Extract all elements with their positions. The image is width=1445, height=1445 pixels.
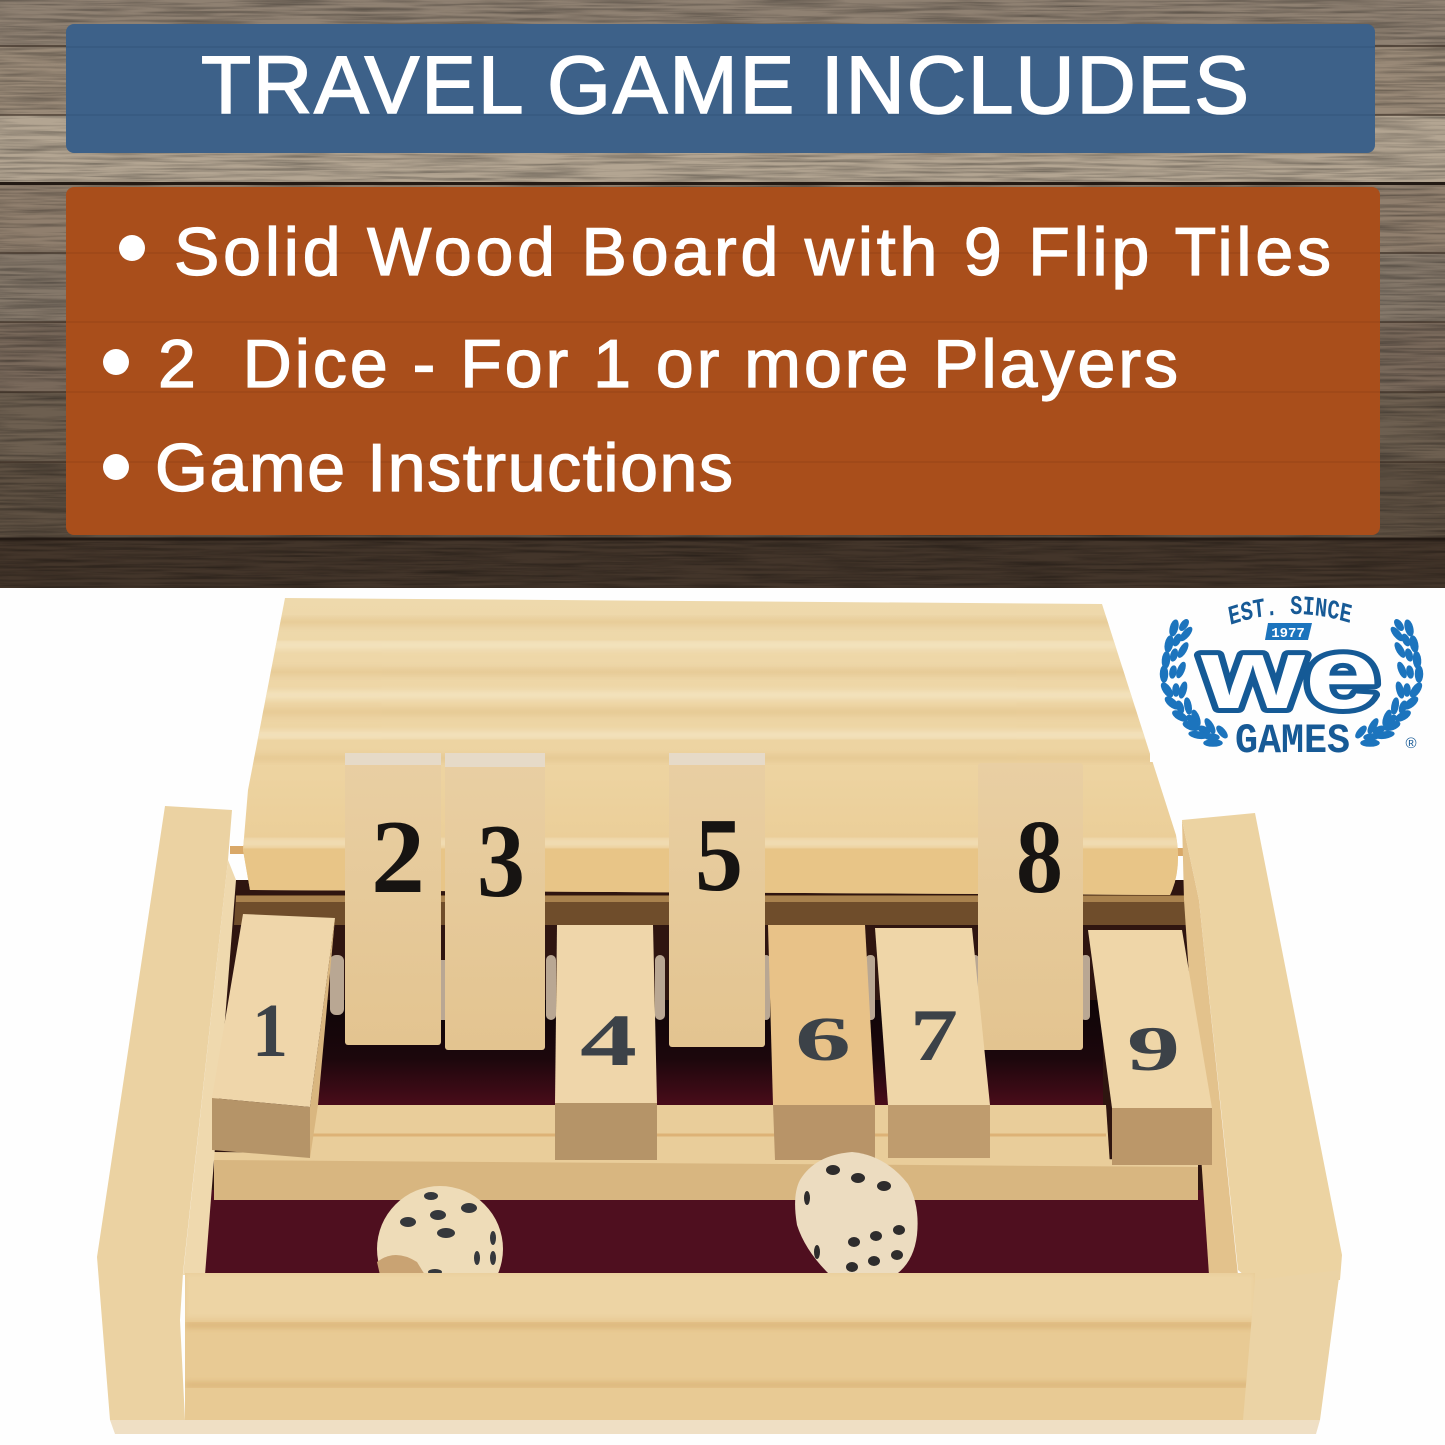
bullet: dice and players: 2 Dice - For 1 or more Players (158, 326, 1178, 402)
flat tile: 6: 6 (795, 1006, 851, 1074)
flat tile: 9: 9 (1127, 1014, 1180, 1084)
bullet: board and tiles: Solid Wood Board with 9 Flip Tiles (174, 214, 1331, 290)
tile rest bar (310, 1105, 1110, 1165)
wood plank background (0, 0, 1445, 588)
upright tile: 8: 8 (1016, 798, 1063, 915)
upright tile: 5: 5 (695, 796, 743, 913)
flat tile: 9 (1088, 930, 1212, 1165)
product photo: shut the box game (97, 598, 1342, 1434)
die showing five (377, 1186, 503, 1273)
flat tile: 7: 7 (910, 995, 958, 1077)
box lid (240, 598, 1185, 895)
upright tile: 2: 2 (371, 798, 425, 915)
logo: right laurel (1354, 618, 1423, 746)
flat tile: 4 (555, 925, 657, 1160)
upright tile: 2 (345, 753, 441, 1045)
interior backdrop (204, 880, 1212, 1275)
logo: registered mark: ® (1405, 735, 1417, 752)
hinge washers (330, 955, 1090, 1020)
box left wall (97, 806, 236, 1420)
logo: 1977 ribbon: 1977 (1271, 626, 1305, 642)
logo: games text: GAMES (1235, 717, 1350, 765)
panel: contents list (66, 187, 1380, 535)
hinge pins (230, 846, 1186, 856)
panel: title banner (66, 24, 1375, 153)
lower felt (204, 1190, 1210, 1280)
upright tile: 3 (445, 753, 545, 1050)
logo: left laurel (1160, 618, 1229, 746)
logo: est. since text: EST. SINCE (1228, 596, 1352, 624)
bullet: instructions: Game Instructions (155, 430, 733, 506)
dark gap behind tiles (234, 895, 1186, 925)
flat tile: 7 (875, 928, 990, 1158)
WE Games logo (1150, 596, 1424, 765)
box right wall (1182, 813, 1342, 1280)
flat tile: 1 (212, 914, 335, 1158)
flat tile: 4: 4 (580, 1000, 637, 1082)
box front rail (185, 1273, 1255, 1420)
front bar (214, 1157, 1198, 1200)
logo: we wordmark: we (1200, 618, 1379, 730)
flat tile: 6 (768, 925, 875, 1160)
box front right post (1243, 1270, 1340, 1420)
logo: 1977 ribbon (1265, 623, 1312, 642)
box base strip (110, 1420, 1320, 1434)
dice (377, 1152, 918, 1273)
die showing six (795, 1152, 918, 1273)
title: TRAVEL GAME INCLUDES (201, 40, 1249, 131)
flat tile: 1: 1 (252, 989, 288, 1073)
upper felt (318, 1000, 1103, 1106)
upright tile: 8 (978, 763, 1083, 1050)
upright tile: 5 (669, 753, 765, 1047)
upright tile: 3: 3 (477, 802, 525, 919)
